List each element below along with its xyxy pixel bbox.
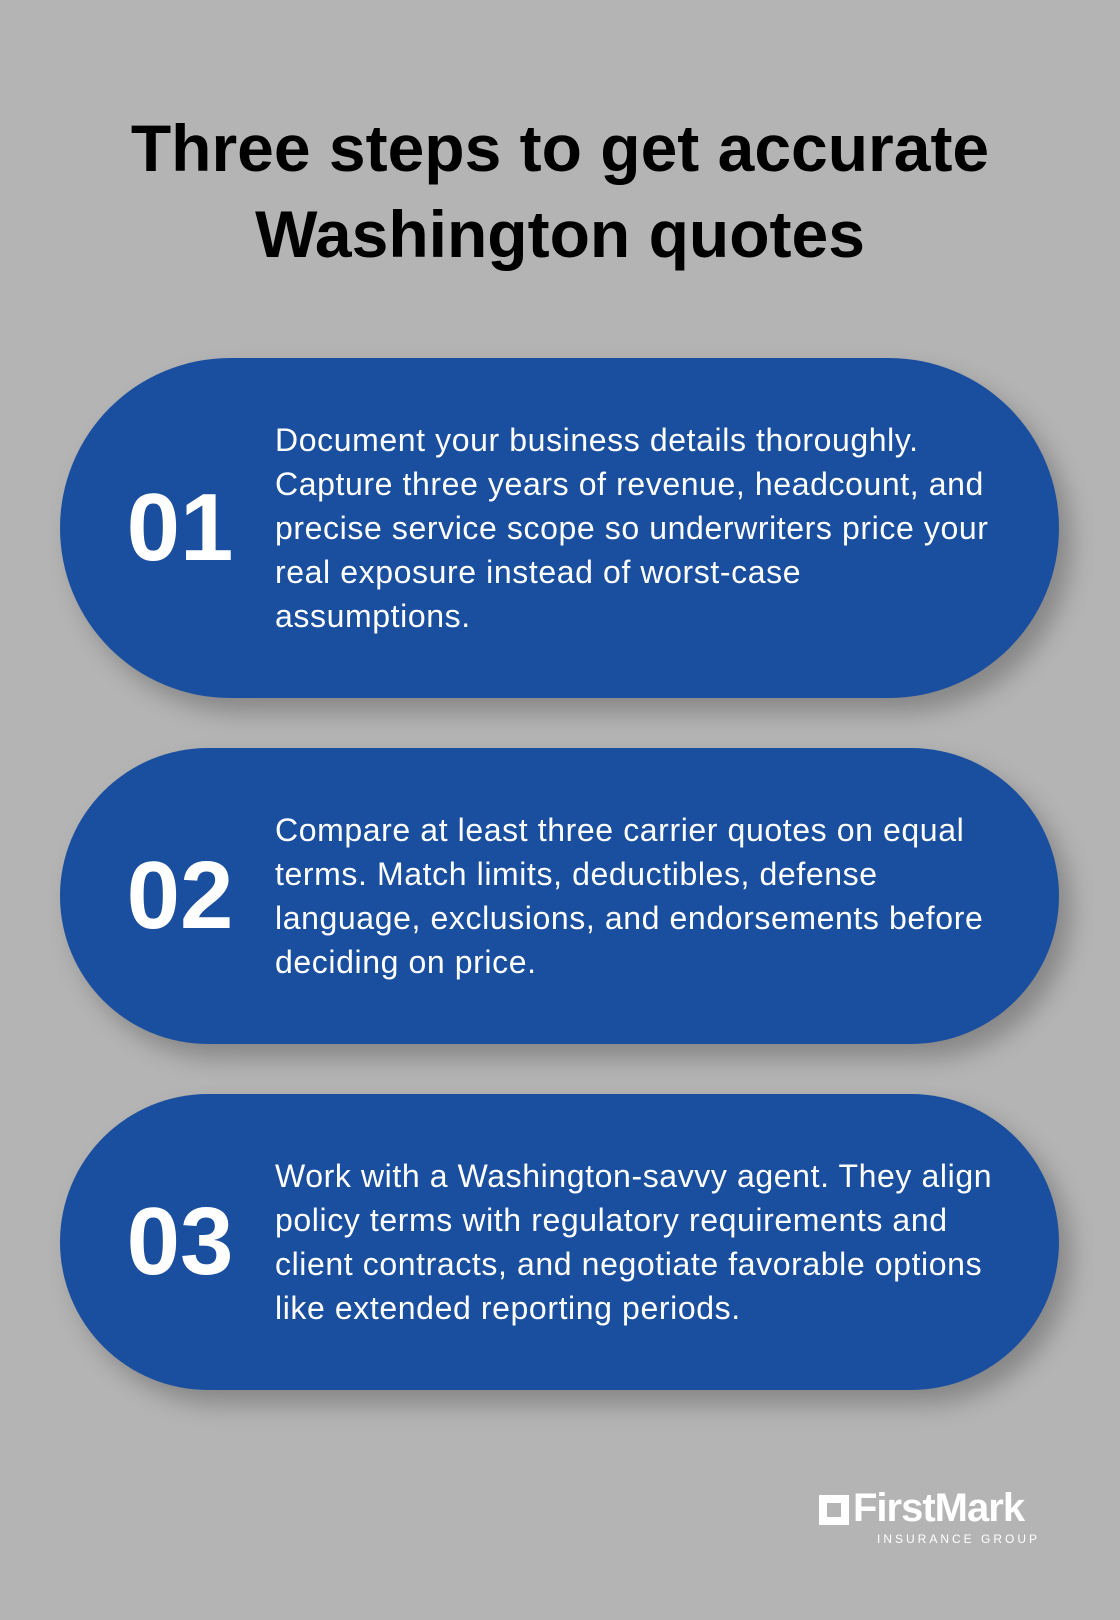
logo	[819, 1486, 1040, 1546]
panel: step 01	[60, 358, 1059, 698]
icon: logo square	[819, 1495, 849, 1525]
text: step 01: Capture three years of revenue, headcount, and	[275, 466, 984, 502]
text: step 03: like extended reporting periods.	[275, 1290, 741, 1326]
text: step 01: precise service scope so underwriters price your	[275, 510, 989, 546]
title	[131, 111, 989, 271]
text: step 01	[275, 422, 989, 634]
title: Three steps to get accurate	[131, 111, 989, 185]
text: step 02	[275, 812, 983, 980]
text: step 03: Work with a Washington-savvy agent. They align	[275, 1158, 992, 1194]
text: step 01: real exposure instead of worst-case	[275, 554, 801, 590]
text: step 01: Document your business details thoroughly.	[275, 422, 919, 458]
number 03: 03	[127, 1188, 233, 1295]
text: step 03	[275, 1158, 992, 1326]
number 01: 01	[127, 474, 233, 581]
number 02: 02	[127, 842, 233, 949]
text: step 02: Compare at least three carrier quotes on equal	[275, 812, 964, 848]
panel: step 03	[60, 1094, 1059, 1390]
text: step 03: policy terms with regulatory requirements and	[275, 1202, 948, 1238]
logo: FirstMark	[853, 1486, 1024, 1530]
text: step 02: deciding on price.	[275, 944, 537, 980]
logo: INSURANCE GROUP	[877, 1532, 1040, 1546]
text: step 03: client contracts, and negotiate favorable options	[275, 1246, 982, 1282]
text: step 01: assumptions.	[275, 598, 471, 634]
title: Washington quotes	[255, 197, 865, 271]
text: step 02: terms. Match limits, deductibles, defense	[275, 856, 878, 892]
text: step 02: language, exclusions, and endorsements before	[275, 900, 983, 936]
panel: step 02	[60, 748, 1059, 1044]
